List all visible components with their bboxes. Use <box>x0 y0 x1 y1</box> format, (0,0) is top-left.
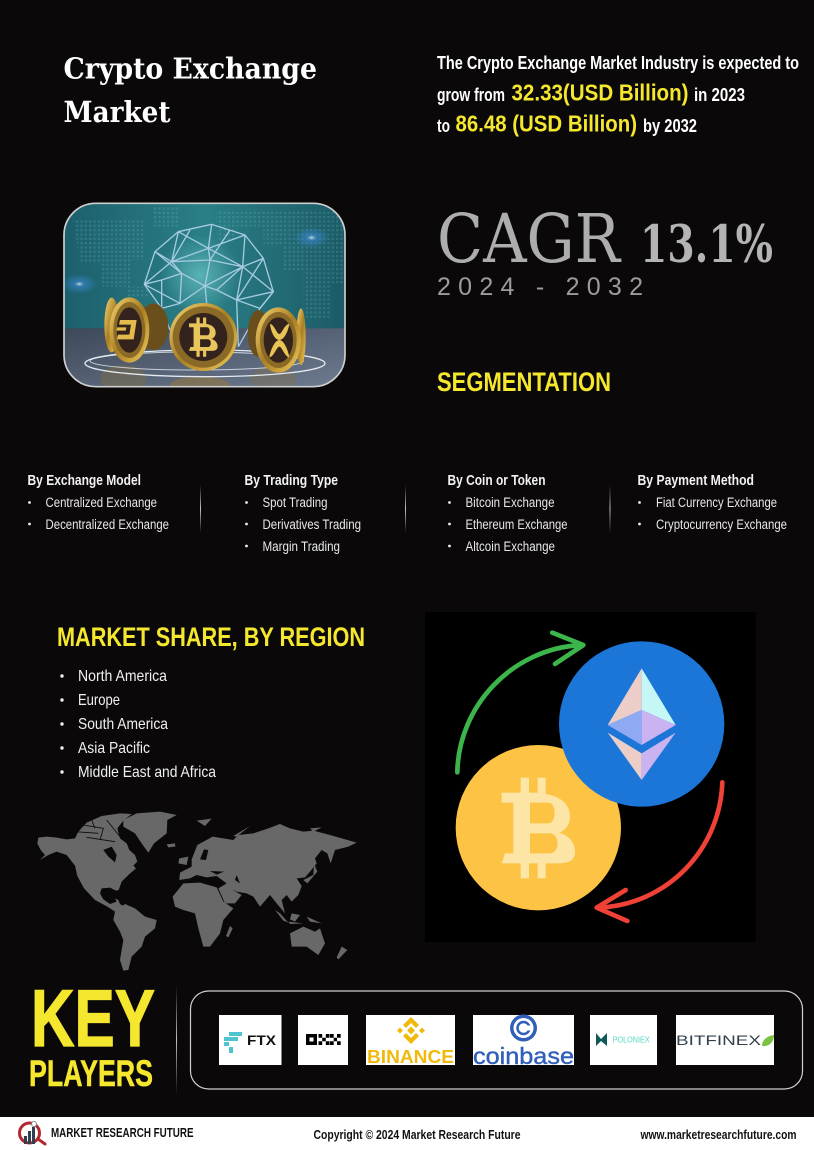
region list: Asia Pacific <box>78 740 150 757</box>
segment column: by payment method: Cryptocurrency Exchange <box>656 517 787 532</box>
coin: dash <box>104 297 168 363</box>
footer logo icon <box>20 1122 45 1144</box>
logo: Binance <box>366 1015 455 1067</box>
segment column: by trading type: Spot Trading <box>262 495 328 510</box>
region list <box>60 668 216 781</box>
segment column: by exchange model: Centralized Exchange <box>46 495 157 510</box>
arrow: red <box>597 782 722 921</box>
logo: FTX: FTX <box>247 1032 277 1048</box>
segment column: by coin or token <box>448 473 568 554</box>
title <box>64 52 317 129</box>
segment column: by trading type: Margin Trading <box>262 539 340 554</box>
market growth statement <box>437 53 799 136</box>
key players heading <box>29 974 155 1094</box>
region list: North America <box>78 668 167 685</box>
market share heading: MARKET SHARE, BY REGION <box>57 622 365 652</box>
segment column: by coin or token: By Coin or Token <box>448 473 546 489</box>
bitcoin circle <box>456 745 621 910</box>
ethereum circle <box>559 641 724 807</box>
logo: Binance: BINANCE <box>367 1046 454 1067</box>
footer: Copyright © 2024 Market Research Future <box>314 1127 520 1142</box>
logo: Poloniex: POLONIEX <box>613 1036 650 1045</box>
market growth statement: grow from <box>437 85 505 105</box>
key players heading: KEY <box>31 974 155 1064</box>
segment column: by payment method <box>638 473 787 532</box>
image frame <box>64 203 345 387</box>
market growth statement: 86.48 (USD Billion) <box>456 110 637 136</box>
image: crypto coins and wireframe sphere <box>61 203 345 393</box>
logo: Coinbase <box>473 1014 574 1069</box>
wireframe sphere <box>144 224 273 347</box>
market growth statement: to <box>437 116 450 136</box>
segment column: by payment method: By Payment Method <box>638 473 754 489</box>
logo: OKX <box>298 1015 348 1065</box>
logo: Bitfinex <box>676 1015 774 1065</box>
segment column: by exchange model: By Exchange Model <box>28 473 141 489</box>
title: Market <box>64 95 171 129</box>
CAGR figure <box>437 200 773 301</box>
segment column: by trading type <box>244 473 361 554</box>
segment column: by exchange model: Decentralized Exchange <box>46 517 169 532</box>
CAGR figure: 13.1% <box>640 215 773 275</box>
segment column: by coin or token: Altcoin Exchange <box>466 539 555 554</box>
segment column: by coin or token: Bitcoin Exchange <box>466 495 554 510</box>
world map <box>37 812 357 971</box>
segment column: by exchange model <box>28 473 169 532</box>
region list: South America <box>78 716 168 733</box>
segment column: by trading type: By Trading Type <box>244 473 338 489</box>
footer: MARKET RESEARCH FUTURE <box>51 1125 194 1140</box>
platform ring <box>85 350 325 377</box>
CAGR figure: 2024 - 2032 <box>437 273 643 301</box>
image: bitcoin to ethereum exchange <box>425 612 756 942</box>
CAGR figure: CAGR <box>437 200 622 278</box>
coin: ripple <box>248 307 306 373</box>
logo: Poloniex <box>590 1015 657 1065</box>
footer <box>0 1117 814 1150</box>
segment column: by coin or token: Ethereum Exchange <box>466 517 568 532</box>
logo: Bitfinex: BITFINEX <box>676 1033 761 1048</box>
region list: Middle East and Africa <box>78 764 216 781</box>
coin: bitcoin <box>169 303 237 371</box>
logo: Coinbase: coinbase <box>473 1043 574 1069</box>
segment column: by trading type: Derivatives Trading <box>262 517 361 532</box>
market growth statement: 32.33(USD Billion) <box>512 80 688 106</box>
title: Crypto Exchange <box>64 52 317 86</box>
region list: Europe <box>78 692 120 709</box>
arrow: green <box>457 633 583 772</box>
key players heading: PLAYERS <box>29 1053 153 1094</box>
market growth statement: in 2023 <box>694 85 745 105</box>
key players panel <box>190 991 802 1089</box>
segmentation heading: SEGMENTATION <box>437 367 611 397</box>
segment column: by payment method: Fiat Currency Exchange <box>656 495 777 510</box>
logo: FTX <box>219 1015 282 1065</box>
market growth statement: by 2032 <box>643 116 697 136</box>
